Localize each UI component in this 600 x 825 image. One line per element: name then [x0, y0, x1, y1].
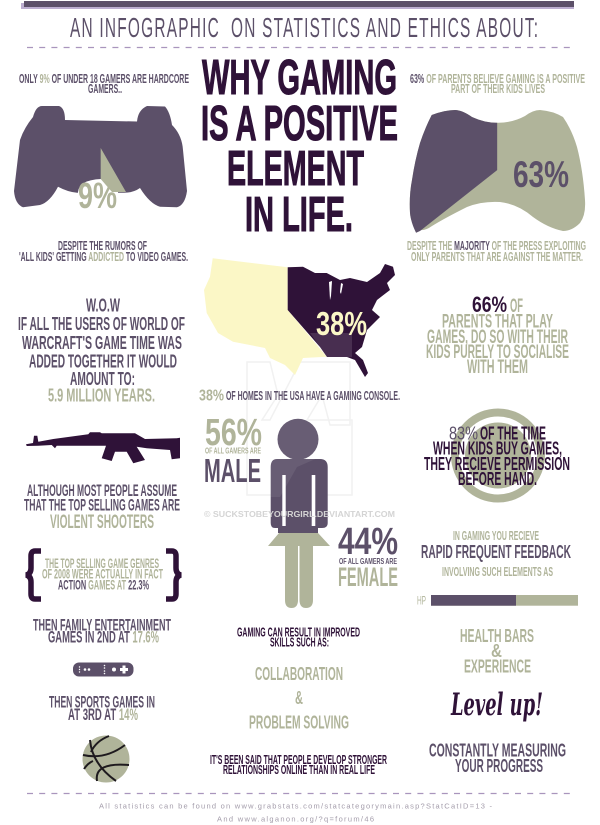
bracket callout: top selling genres — [26, 551, 181, 599]
watermark: © SUCKSTOBEYOURGIRL.DEVIANTART.COM — [204, 509, 395, 519]
header bar — [21, 1, 574, 9]
text: 56% male: OF ALL GAMERS ARE — [205, 446, 261, 456]
text: 44% female: 44% — [338, 521, 398, 563]
text: violent shooters: ALTHOUGH MOST PEOPLE ASSUME — [27, 481, 177, 500]
text: health bars and experience: HEALTH BARS — [460, 625, 534, 646]
watermark logo outline — [247, 362, 352, 495]
text: 83% permission: OF THE TIME — [480, 423, 546, 443]
main title: IN LIFE. — [245, 188, 353, 242]
main title: ELEMENT — [227, 142, 364, 196]
text: sports games: AT 3RD AT 14% — [68, 706, 138, 724]
icon: person figure — [268, 418, 330, 608]
text: 66% of parents — [426, 292, 569, 378]
main title: IS A POSITIVE — [201, 97, 398, 151]
text: family games — [33, 617, 171, 646]
text: 63% of parents — [410, 72, 585, 96]
bracket callout: top selling genres: ACTION GAMES AT 22.3% — [58, 577, 149, 592]
footer sources — [99, 802, 493, 824]
health bar — [417, 594, 578, 608]
text: online relationships: IT'S BEEN SAID THAT PEOPLE DEVELOP STRONGER — [210, 752, 387, 767]
text: health bars and experience: EXPERIENCE — [464, 656, 531, 677]
text: online relationships — [210, 752, 387, 777]
text: world of warcraft: IF ALL THE USERS OF WORLD OF — [18, 313, 185, 334]
text: 44% female: FEMALE — [338, 562, 398, 592]
text: world of warcraft: WARCRAFT'S GAME TIME WAS — [22, 332, 182, 353]
icon: assault rifle — [26, 432, 180, 463]
text: improved skills: GAMING CAN RESULT IN IMPROVED — [237, 626, 360, 640]
text: world of warcraft: ADDED TOGETHER IT WOULD — [29, 350, 177, 371]
bracket callout: top selling genres: THE TOP SELLING GAME GENRES — [45, 556, 159, 571]
text: collaboration and problem solving: COLLABORATION — [255, 663, 343, 684]
map: usa 38% of homes: 38% — [316, 305, 367, 342]
text: 44% female: OF ALL GAMERS ARE — [339, 557, 397, 566]
map: usa 38% of homes — [204, 258, 395, 377]
text: health bars and experience: & — [491, 640, 502, 661]
text: improved skills — [237, 626, 360, 650]
icon: target rings — [455, 412, 541, 498]
text: rumors of addiction — [19, 239, 188, 264]
icon: wii remote — [73, 662, 134, 676]
icon: xbox controller 63% chart — [410, 110, 585, 240]
text: sports games: THEN SPORTS GAMES IN — [49, 694, 155, 712]
text: collaboration and problem solving — [249, 663, 349, 733]
text: 56% male: MALE — [204, 452, 261, 489]
text: health bars and experience — [460, 625, 534, 677]
text: rumors of addiction: DESPITE THE RUMORS OF — [58, 239, 147, 253]
text: 9% of hardcore gamers — [19, 72, 189, 96]
text: improved skills: SKILLS SUCH AS: — [270, 636, 329, 650]
text: 83% permission — [424, 423, 570, 489]
text: 56% male: 56% — [205, 412, 262, 454]
subtitle heading: AN INFOGRAPHIC ON STATISTICS AND ETHICS ABOUT: — [70, 12, 538, 43]
text: 9% of hardcore gamers: GAMERS.. — [88, 82, 122, 96]
text: world of warcraft: AMOUNT TO: — [70, 368, 135, 389]
footer sources: All statistics can be found on www.grabstats.com/statcategorymain.asp?StatCatID=13 - — [99, 802, 493, 810]
text: rapid frequent feedback — [421, 529, 571, 579]
icon: basketball — [82, 736, 130, 782]
text: world of warcraft: 5.9 MILLION YEARS. — [48, 385, 155, 406]
text: 38% of homes: OF HOMES IN THE USA HAVE A GAMING CONSOLE. — [226, 389, 400, 403]
text: press exploiting — [407, 239, 586, 264]
text: violent shooters — [24, 481, 180, 533]
icon: playstation controller 9% chart: 9% — [78, 175, 117, 216]
text: 66% of parents: 66% — [472, 292, 507, 317]
health bar: HP — [417, 594, 426, 608]
footer sources: And www.alganon.org/?q=forum/46 — [217, 814, 375, 824]
text: collaboration and problem solving: & — [295, 687, 303, 708]
icon: xbox controller 63% chart: 63% — [513, 154, 569, 195]
text: 38% of homes — [199, 388, 400, 404]
text: rumors of addiction: 'ALL KIDS' GETTING ADDICTED TO VIDEO GAMES. — [19, 250, 188, 264]
text: 66% of parents: WITH THEM — [467, 357, 528, 378]
text: sports games — [49, 694, 155, 724]
text: world of warcraft — [18, 295, 185, 406]
text: world of warcraft: W.O.W — [86, 295, 120, 316]
text: violent shooters: VIOLENT SHOOTERS — [50, 512, 154, 533]
text: family games: THEN FAMILY ENTERTAINMENT — [33, 617, 171, 635]
text: 83% permission: 83% — [449, 423, 478, 443]
bracket callout: top selling genres: OF 2008 WERE ACTUALLY IN FACT — [42, 566, 163, 581]
text: family games: GAMES IN 2ND AT 17.6% — [48, 628, 159, 646]
main title — [201, 51, 398, 242]
text: collaboration and problem solving: PROBLEM SOLVING — [249, 712, 349, 733]
text: violent shooters: THAT THE TOP SELLING GAMES ARE — [24, 496, 180, 515]
text: 38% of homes: 38% — [199, 388, 224, 404]
text: 9% of hardcore gamers: ONLY 9% OF UNDER 18 GAMERS ARE HARDCORE — [19, 72, 189, 86]
text: 56% male — [204, 412, 262, 489]
icon: playstation controller 9% chart — [14, 106, 187, 216]
text: 44% female — [338, 521, 398, 592]
text: online relationships: RELATIONSHIPS ONLINE THAN IN REAL LIFE — [223, 762, 375, 777]
text: constantly measuring — [429, 740, 566, 776]
main title: WHY GAMING — [202, 51, 397, 105]
text: 66% of parents: OF — [510, 296, 523, 317]
text: 83% permission: BEFORE HAND. — [458, 469, 537, 489]
